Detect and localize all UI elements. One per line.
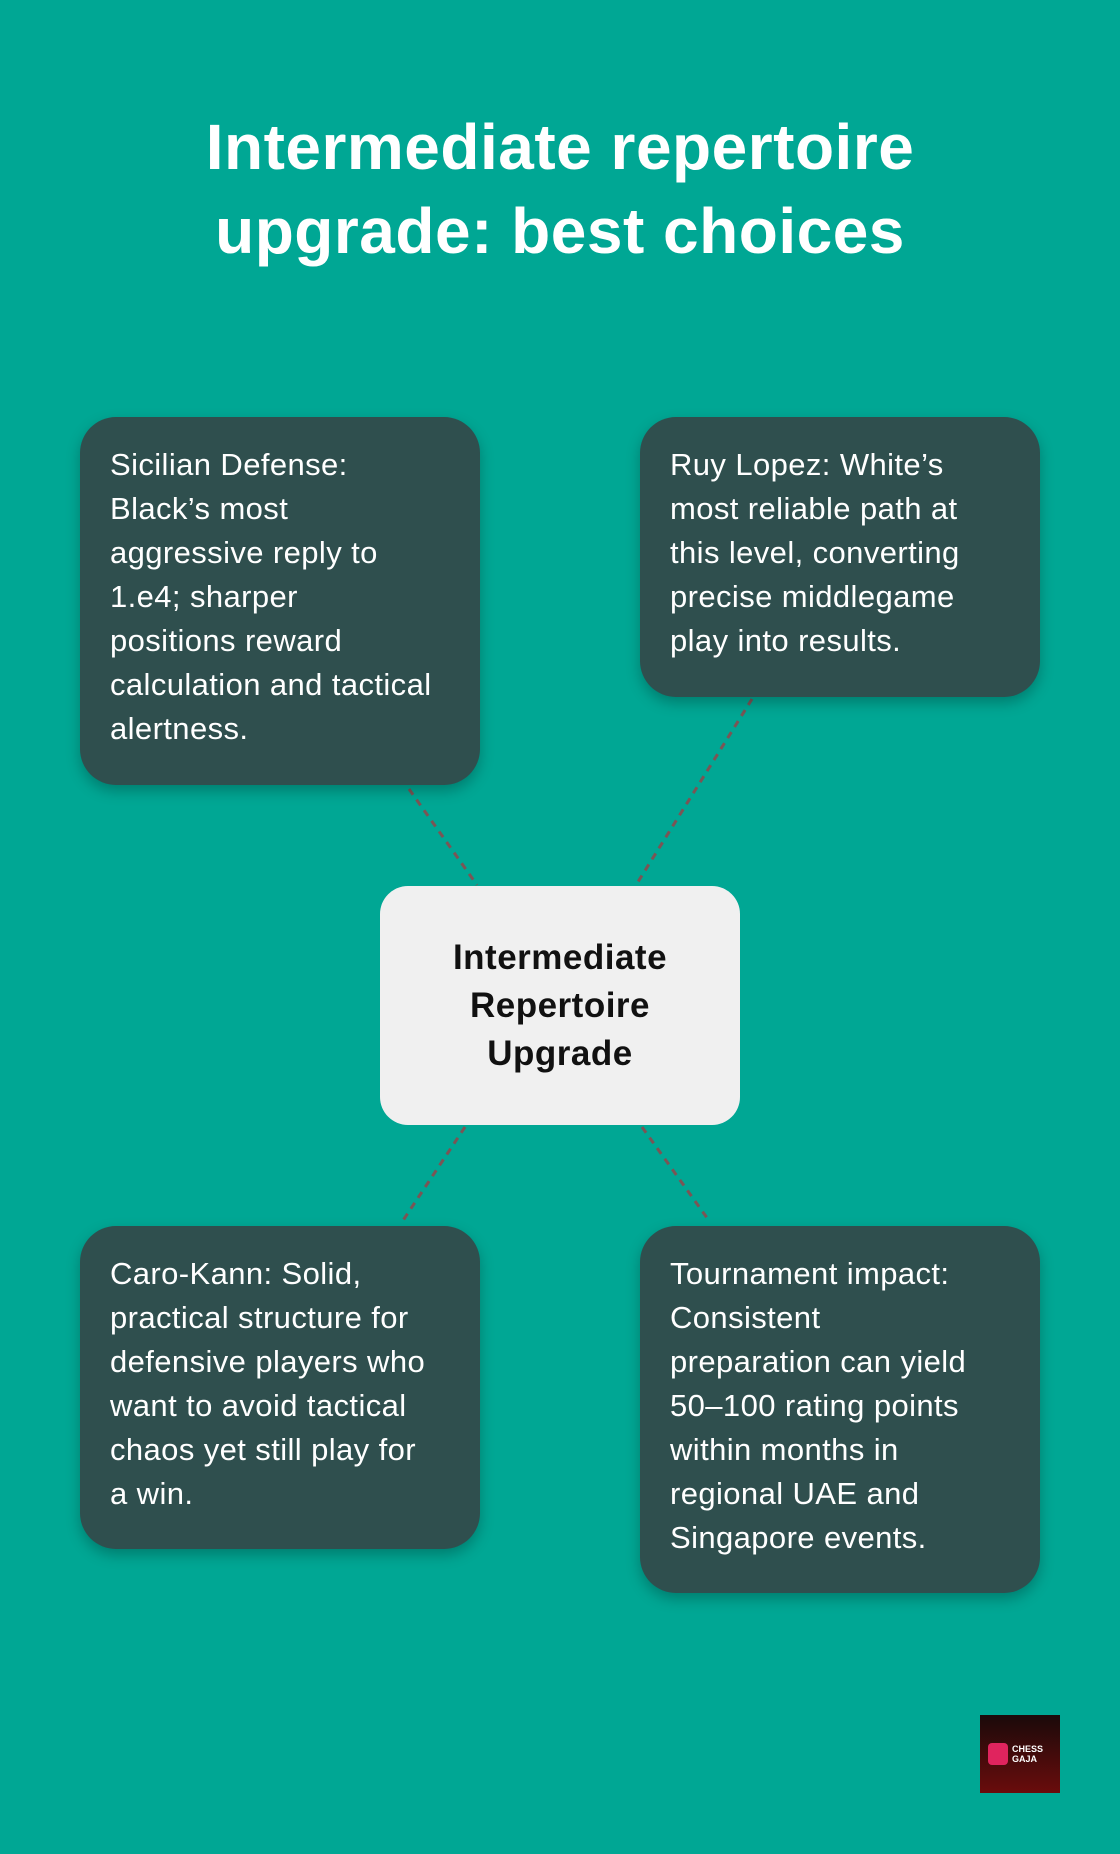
panel: Tournament impact: within months in xyxy=(670,1432,899,1467)
panel: Caro-Kann: practical structure for xyxy=(110,1300,409,1335)
panel: Sicilian Defense xyxy=(80,417,480,785)
panel: Tournament impact: 50–100 rating points xyxy=(670,1388,959,1423)
panel: Caro-Kann xyxy=(80,1226,480,1549)
center node: Intermediate xyxy=(453,938,667,976)
panel: Ruy Lopez: this level, converting xyxy=(670,535,960,570)
center node: Upgrade xyxy=(487,1034,633,1072)
panel: Sicilian Defense: aggressive reply to xyxy=(110,535,378,570)
panel: Sicilian Defense: Black’s most xyxy=(110,491,288,526)
panel: Tournament impact: Tournament impact: xyxy=(670,1256,949,1291)
panel: Caro-Kann: chaos yet still play for xyxy=(110,1432,416,1467)
panel: Sicilian Defense: positions reward xyxy=(110,623,342,658)
panel: Sicilian Defense: Sicilian Defense: xyxy=(110,447,348,482)
center node xyxy=(380,886,740,1125)
logo: CHESS xyxy=(1012,1744,1043,1754)
logo: GAJA xyxy=(1012,1754,1037,1764)
title: Intermediate repertoire xyxy=(206,111,914,183)
panel: Ruy Lopez xyxy=(640,417,1040,697)
panel: Caro-Kann: want to avoid tactical xyxy=(110,1388,407,1423)
panel: Ruy Lopez: Ruy Lopez: White’s xyxy=(670,447,944,482)
panel: Caro-Kann: defensive players who xyxy=(110,1344,425,1379)
panel: Tournament impact: regional UAE and xyxy=(670,1476,919,1511)
panel: Tournament impact: Singapore events. xyxy=(670,1520,927,1555)
logo xyxy=(980,1715,1060,1793)
panel: Tournament impact xyxy=(640,1226,1040,1593)
panel: Ruy Lopez: precise middlegame xyxy=(670,579,955,614)
panel: Tournament impact: preparation can yield xyxy=(670,1344,966,1379)
panel: Caro-Kann: Caro-Kann: Solid, xyxy=(110,1256,362,1291)
panel: Tournament impact: Consistent xyxy=(670,1300,820,1335)
panel: Sicilian Defense: calculation and tactical xyxy=(110,667,432,702)
panel: Sicilian Defense: 1.e4; sharper xyxy=(110,579,298,614)
panel: Ruy Lopez: most reliable path at xyxy=(670,491,958,526)
center node: Repertoire xyxy=(470,986,650,1024)
title: upgrade: best choices xyxy=(215,195,905,267)
panel: Ruy Lopez: play into results. xyxy=(670,623,901,658)
title xyxy=(206,111,914,267)
panel: Sicilian Defense: alertness. xyxy=(110,711,248,746)
panel: Caro-Kann: a win. xyxy=(110,1476,193,1511)
